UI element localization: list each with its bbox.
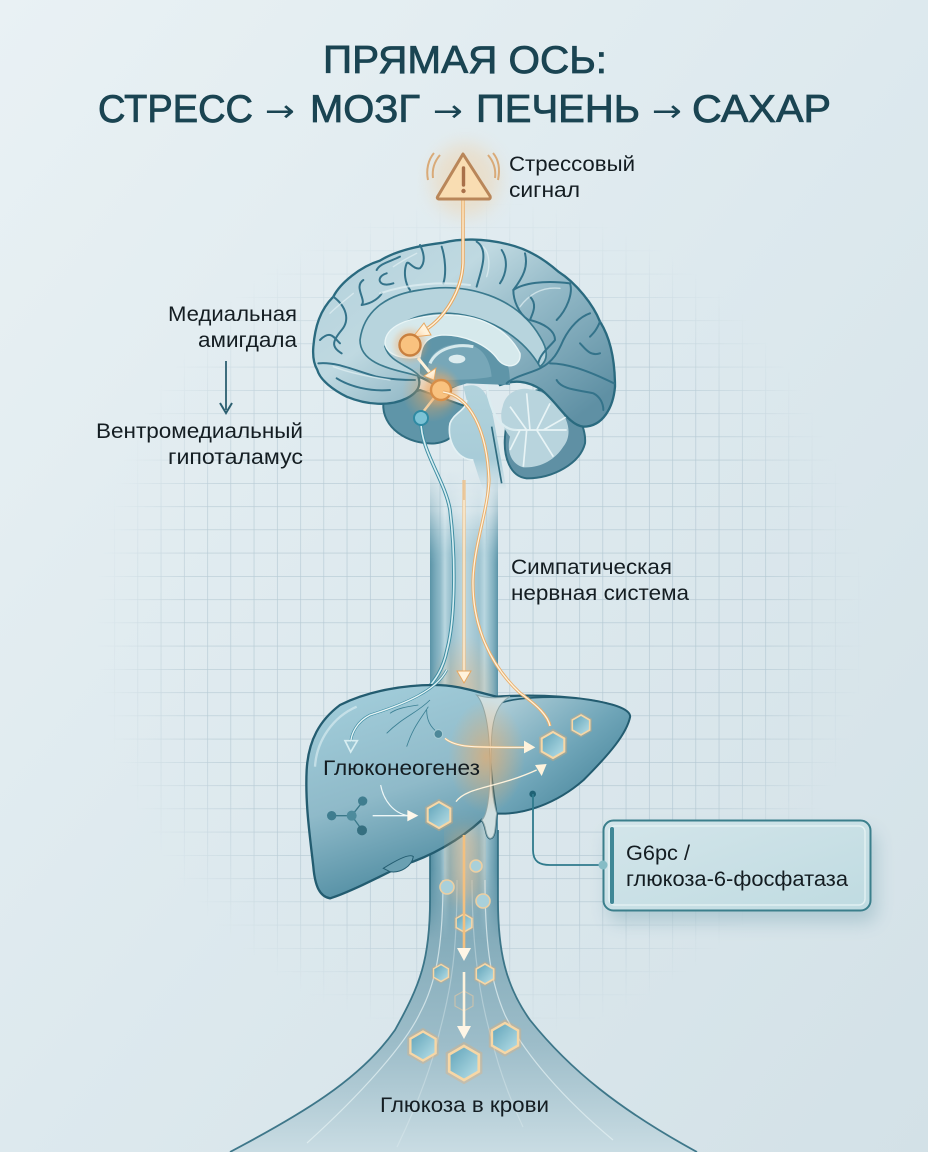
- brain: [313, 240, 615, 490]
- descending arrows: [457, 835, 471, 1039]
- node: blue: [414, 411, 428, 425]
- orange glow above liver: [430, 635, 498, 745]
- title: →: [265, 94, 295, 129]
- vertical tube flaring into bloodstream: [230, 440, 697, 1152]
- label: gluconeogenesis: Глюконеогенез: [323, 757, 480, 780]
- title: ПРЯМАЯ ОСЬ:: [323, 39, 607, 82]
- glow behind hypothalamus nodes: [402, 362, 462, 422]
- title: САХАР: [692, 88, 831, 131]
- molecule icon: [327, 796, 367, 835]
- liver lobes: [306, 685, 630, 898]
- glucose hexagons in tube: [407, 860, 521, 1084]
- liver glow: [448, 700, 525, 813]
- veins: [387, 700, 438, 747]
- callout connector: [533, 794, 604, 865]
- label: stress signal: Стрессовый: [509, 153, 635, 176]
- title: МОЗГ: [310, 88, 420, 131]
- icon: warning: [427, 144, 499, 216]
- label: sympathetic nervous system: [511, 556, 689, 605]
- title: ПЕЧЕНЬ: [476, 88, 640, 131]
- thalamus: [428, 344, 492, 380]
- arrow molecule to hexagon: [373, 785, 418, 821]
- title: СТРЕСС: [98, 88, 253, 131]
- title: →: [652, 94, 682, 129]
- corpus callosum outer band: [360, 288, 546, 377]
- label: stress signal: [509, 153, 635, 202]
- label: stress signal: сигнал: [509, 179, 580, 202]
- left highlight: [315, 707, 357, 767]
- lower gallbladder: [383, 856, 413, 872]
- branch arrow: [351, 670, 447, 742]
- arrow dot to hexagon: [445, 738, 535, 753]
- tube edges: [230, 830, 697, 1152]
- vertical orange signal line in tube: [457, 480, 471, 683]
- label: medial amygdala: Медиальная: [168, 303, 297, 326]
- right lobe shade: [490, 697, 630, 813]
- branch arrowhead: [345, 741, 357, 752]
- title: [98, 39, 831, 131]
- label: sympathetic nervous system: нервная система: [511, 582, 689, 605]
- node: ventromedial hypothalamus: [425, 374, 457, 406]
- label: sympathetic nervous system: Симпатическая: [511, 556, 672, 579]
- title: →: [433, 94, 463, 129]
- blue nerve from ventromedial node to liver: [421, 420, 454, 692]
- arrow: amygdala to hypothalamus: [220, 361, 232, 413]
- label: medial amygdala: амигдала: [198, 329, 297, 352]
- cerebellum: [483, 375, 585, 478]
- inner dark ventricle area: [420, 322, 510, 388]
- node: medial amygdala: [394, 329, 426, 361]
- connector dot: [529, 791, 536, 797]
- callout: G6pc: G6pc /: [626, 842, 690, 865]
- hypothalamus underside: [383, 390, 467, 443]
- label: ventromedial hypothalamus: Вентромедиальный: [96, 420, 303, 443]
- stress signal line to amygdala: [413, 200, 463, 337]
- fold highlights: [330, 247, 560, 380]
- brain folds: [318, 242, 614, 410]
- brainstem: [449, 385, 507, 490]
- cerebrum: [313, 240, 615, 427]
- callout: G6pc: [598, 820, 876, 922]
- arrow hexagon to hexagon: [456, 764, 547, 802]
- sympathetic nerve line into liver: [443, 392, 550, 726]
- callout: G6pc: глюкоза-6-фосфатаза: [626, 868, 848, 891]
- label: blood glucose: Глюкоза в крови: [380, 1094, 549, 1117]
- vertical glow below liver: [450, 830, 480, 900]
- amygdala to hypothalamus arrow: [418, 358, 436, 412]
- glucose hexagons in liver: [425, 712, 592, 831]
- background grid: [114, 224, 844, 1006]
- tube inner stripes: [430, 470, 498, 940]
- label: ventromedial hypothalamus: гипоталамус: [168, 446, 303, 469]
- corpus callosum light crescent: [385, 315, 520, 366]
- label: ventromedial hypothalamus: [96, 420, 303, 469]
- nerve end dot: [434, 730, 443, 738]
- label: medial amygdala: [168, 303, 297, 352]
- tube light streams: [307, 880, 613, 1147]
- falciform band: [477, 695, 510, 838]
- liver: [306, 670, 630, 898]
